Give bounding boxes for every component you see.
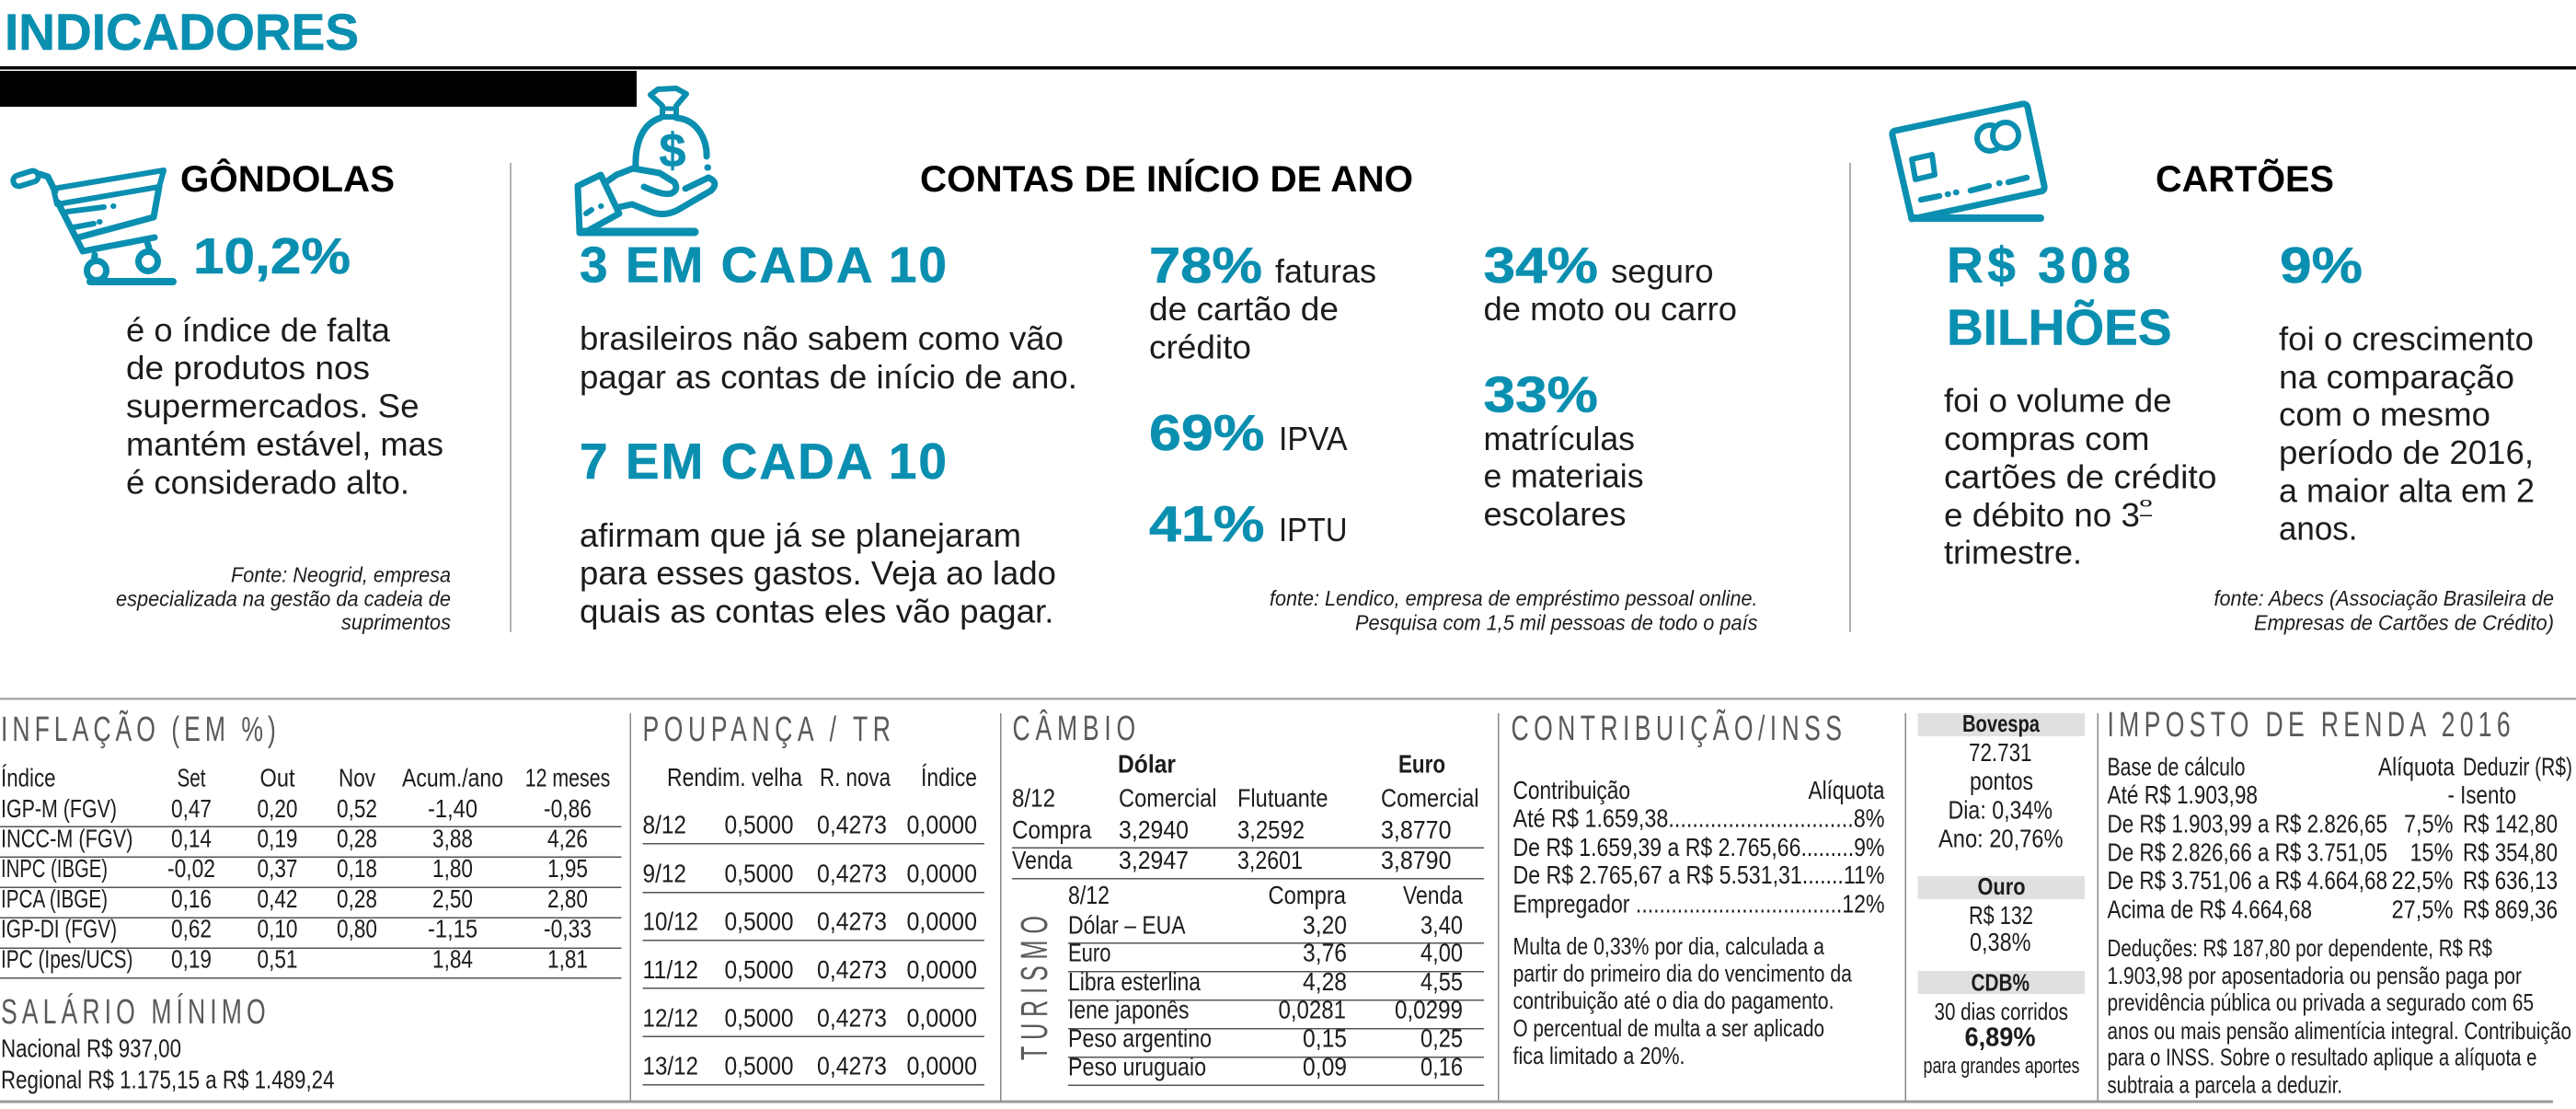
table: inflation: 3,88 xyxy=(432,825,473,852)
vertical label: turismo: TURISMO xyxy=(1015,916,1056,1060)
stat: R$ 308 bilhões: BILHÕES xyxy=(1947,298,2171,355)
table: tourism exchange: 4,55 xyxy=(1420,967,1463,996)
heading: CONTRIBUIÇÃO/INSS xyxy=(1511,708,1842,747)
table: contribution rates: De R$ 2.765,67 a R$ 5.531,31.......11% xyxy=(1512,861,1884,889)
stat: 9%: na comparação xyxy=(2279,358,2514,396)
table: exchange rates: 3,8790 xyxy=(1381,846,1452,874)
stat: R$ 308 bilhões: compras com xyxy=(1944,420,2149,457)
table: inflation: 2,80 xyxy=(547,884,588,913)
table: inflation: -0,86 xyxy=(544,794,592,823)
table: savings: 0,4273 xyxy=(817,1003,887,1033)
table: income tax: 27,5% xyxy=(2392,895,2453,924)
text block: de produtos nos xyxy=(126,349,370,387)
source note: Empresas de Cartões de Crédito) xyxy=(2254,611,2554,635)
text block: multa: contribuição até o dia do pagamento. xyxy=(1512,987,1834,1014)
source note: Pesquisa com 1,5 mil pessoas de todo o país xyxy=(1355,611,1758,635)
table: inflation: INPC (IBGE) xyxy=(1,854,108,883)
table: tourism exchange: 0,0299 xyxy=(1395,996,1463,1023)
box: CDB: 6,89% xyxy=(1965,1023,2036,1053)
stat: 33%: 33% xyxy=(1483,366,1598,423)
icon: credit card xyxy=(1892,104,2044,219)
table: savings: 0,5000 xyxy=(725,1003,793,1033)
table: inflation: 12 meses xyxy=(525,764,610,791)
table: inflation: 0,37 xyxy=(258,854,298,883)
text block: é o índice de falta xyxy=(126,311,391,349)
table: tourism exchange: Venda xyxy=(1403,881,1463,909)
box: ouro: R$ 132 xyxy=(1969,901,2033,930)
table: savings: 0,5000 xyxy=(725,955,793,984)
table: savings: 0,4273 xyxy=(817,955,887,984)
text block: multa: fica limitado a 20%. xyxy=(1512,1042,1685,1069)
table: savings: 0,0000 xyxy=(907,860,977,887)
stat: 9% xyxy=(2279,237,2535,547)
table: savings: 0,4273 xyxy=(817,1051,887,1080)
box: CDB: CDB% xyxy=(1971,968,2030,996)
table: exchange rates: Dólar xyxy=(1118,749,1176,779)
table: income tax: Alíquota xyxy=(2378,753,2455,780)
table: inflation: 1,84 xyxy=(432,944,473,974)
table: tourism exchange: Compra xyxy=(1268,881,1346,909)
table: inflation: 1,95 xyxy=(547,854,588,883)
panel: câmbio xyxy=(1012,708,1484,1086)
table: income tax: De R$ 2.826,66 a R$ 3.751,05 xyxy=(2107,838,2387,867)
stat: 7 em cada 10: afirmam que já se planejaram xyxy=(580,516,1021,554)
stat: 69%: IPVA xyxy=(1279,420,1347,457)
heading: INFLAÇÃO (EM %) xyxy=(1,709,276,748)
panel: inflação xyxy=(0,709,622,1093)
text block: é considerado alto. xyxy=(126,464,409,501)
table: savings: 0,0000 xyxy=(907,810,977,839)
table: inflation: INCC-M (FGV) xyxy=(1,825,132,852)
box: ouro: Ouro xyxy=(1978,872,2026,900)
stat: 78%: crédito xyxy=(1149,328,1251,366)
table: inflation: 0,16 xyxy=(171,884,212,913)
table: tourism exchange: Peso argentino xyxy=(1068,1023,1212,1053)
text block: deduções: subtraia a parcela a deduzir. xyxy=(2107,1071,2342,1099)
table: income tax xyxy=(2107,753,2572,924)
table: exchange rates: Comercial xyxy=(1381,784,1479,812)
source note: suprimentos xyxy=(341,610,451,634)
text: minimum wage values: Regional R$ 1.175,15 a R$ 1.489,24 xyxy=(1,1066,335,1093)
table: exchange rates: Euro xyxy=(1398,749,1445,779)
table: inflation: -1,40 xyxy=(428,794,477,823)
stat: 9%: anos. xyxy=(2279,510,2357,547)
table: exchange rates: Compra xyxy=(1012,815,1092,844)
heading: POUPANÇA / TR xyxy=(642,709,891,748)
box: bovespa: 72.731 xyxy=(1969,738,2031,767)
table: contribution rates: Alíquota xyxy=(1809,776,1885,804)
stat: 7 em cada 10: 7 EM CADA 10 xyxy=(580,433,947,490)
stat: 78%: 78% xyxy=(1149,237,1262,294)
table: savings: 0,5000 xyxy=(725,860,793,887)
table: tourism exchange xyxy=(1068,881,1484,1086)
icon: hand holding money bag xyxy=(578,88,715,233)
box: bovespa: Bovespa xyxy=(1962,710,2040,737)
table: savings: 0,4273 xyxy=(817,860,887,887)
table: inflation: 4,26 xyxy=(547,825,588,852)
panel: contribuição / INSS xyxy=(1511,708,1885,1069)
stat: 34%: 34% xyxy=(1483,237,1598,294)
table: savings: Índice xyxy=(921,763,977,791)
table: tourism exchange: 0,15 xyxy=(1303,1023,1347,1053)
source note: fonte: Lendico, empresa de empréstimo pessoal online. xyxy=(1270,586,1757,610)
table: exchange rates: 3,2940 xyxy=(1119,815,1189,844)
panel: contas de início de ano xyxy=(578,88,1758,635)
text block: multa: Multa de 0,33% por dia, calculada a xyxy=(1512,932,1824,960)
source note xyxy=(1270,586,1758,635)
text block: deduções xyxy=(2107,934,2571,1099)
table: tourism exchange: Euro xyxy=(1068,939,1111,966)
table: inflation: 0,52 xyxy=(337,794,377,823)
table: contribution rates xyxy=(1512,776,1885,918)
table: tourism exchange: 0,16 xyxy=(1420,1053,1463,1080)
panel: bovespa, ouro, CDB xyxy=(1917,710,2085,1079)
table: inflation: Set xyxy=(177,764,206,791)
stat: R$ 308 bilhões: cartões de crédito xyxy=(1944,458,2217,495)
heading: IMPOSTO DE RENDA 2016 xyxy=(2107,704,2511,744)
stat: 34%: seguro xyxy=(1611,252,1713,290)
big number: 10,2% xyxy=(193,227,351,284)
text block: mantém estável, mas xyxy=(126,425,443,463)
text block: multa: partir do primeiro dia do vencimento da xyxy=(1512,959,1852,987)
table: savings: 0,5000 xyxy=(725,810,793,839)
table: savings xyxy=(642,763,984,1086)
table: inflation: IPC (Ipes/UCS) xyxy=(1,944,132,974)
source note xyxy=(116,563,451,634)
table: tourism exchange: 3,40 xyxy=(1420,911,1463,939)
stat: 78% xyxy=(1149,237,1376,366)
text block: multa xyxy=(1512,932,1852,1069)
table: savings: 11/12 xyxy=(642,955,698,984)
table: savings: 0,5000 xyxy=(725,1051,793,1080)
table: exchange rates xyxy=(1012,749,1484,880)
icon: shopping cart xyxy=(12,169,173,282)
table: inflation: 0,80 xyxy=(337,915,377,942)
table: inflation: 0,28 xyxy=(337,884,377,913)
table: exchange rates: Comercial xyxy=(1119,784,1216,812)
table: contribution rates: Empregador ...................................12% xyxy=(1512,889,1884,918)
stat: R$ 308 bilhões: º xyxy=(2140,497,2153,517)
table: income tax: Até R$ 1.903,98 xyxy=(2107,780,2258,809)
table: inflation: 1,81 xyxy=(547,944,588,974)
table: savings: 0,5000 xyxy=(725,907,793,935)
text block xyxy=(126,311,443,501)
table: inflation: 0,18 xyxy=(337,854,377,883)
table: inflation: 0,10 xyxy=(258,915,298,942)
stat: 9%: 9% xyxy=(2280,237,2363,294)
table: savings: 9/12 xyxy=(642,860,686,887)
stat: 41% xyxy=(1149,495,1347,552)
source note: Fonte: Neogrid, empresa xyxy=(231,563,451,587)
stat: 9%: com o mesmo xyxy=(2279,396,2490,433)
title: INDICADORES xyxy=(5,3,359,61)
table: inflation: IPCA (IBGE) xyxy=(1,884,108,913)
table: inflation: Acum./ano xyxy=(402,764,503,791)
table: savings: 0,4273 xyxy=(817,907,887,935)
stat: 34%: de moto ou carro xyxy=(1483,290,1737,328)
stat: 41%: IPTU xyxy=(1279,511,1347,549)
table: income tax: 15% xyxy=(2410,838,2453,867)
stat: R$ 308 bilhões: foi o volume de xyxy=(1944,381,2171,420)
table: income tax: Acima de R$ 4.664,68 xyxy=(2107,895,2312,924)
table: income tax: Base de cálculo xyxy=(2107,753,2245,780)
box: CDB xyxy=(1917,968,2085,1079)
table: savings: 0,0000 xyxy=(907,955,977,984)
table: savings: R. nova xyxy=(820,763,891,791)
table: inflation: 2,50 xyxy=(432,884,473,913)
table: savings: 0,0000 xyxy=(907,1051,977,1080)
stat: 34% xyxy=(1483,237,1737,328)
table: inflation: IGP-M (FGV) xyxy=(1,794,117,823)
table: tourism exchange: Peso uruguaio xyxy=(1068,1053,1206,1080)
panel: cartões xyxy=(1892,104,2554,635)
box: CDB: para grandes aportes xyxy=(1923,1054,2079,1079)
table: inflation: 0,14 xyxy=(171,825,212,852)
panel: imposto de renda xyxy=(2107,704,2572,1099)
table: inflation: 0,42 xyxy=(258,884,298,913)
stat: R$ 308 bilhões: trimestre. xyxy=(1944,534,2082,571)
stat: R$ 308 bilhões: e débito no 3 xyxy=(1944,496,2140,534)
table: savings: 0,0000 xyxy=(907,907,977,935)
table: income tax: 22,5% xyxy=(2392,866,2453,895)
stat: 3 em cada 10: brasileiros não sabem como vão xyxy=(580,319,1064,357)
stat: 33%: escolares xyxy=(1483,495,1627,533)
stat: 69%: 69% xyxy=(1149,404,1264,461)
table: tourism exchange: 0,09 xyxy=(1303,1053,1347,1080)
table: tourism exchange: 4,28 xyxy=(1303,967,1347,996)
table: tourism exchange: 4,00 xyxy=(1420,939,1463,966)
box: CDB: 30 dias corridos xyxy=(1934,998,2068,1025)
table: savings: 13/12 xyxy=(642,1051,698,1080)
table: inflation: -1,15 xyxy=(428,915,477,942)
table: inflation: 0,62 xyxy=(171,915,212,942)
table: savings: 0,0000 xyxy=(907,1003,977,1033)
stat: 9%: foi o crescimento xyxy=(2279,320,2534,357)
table: exchange rates: 3,8770 xyxy=(1381,815,1452,844)
box: bovespa: pontos xyxy=(1970,767,2033,795)
heading: GÔNDOLAS xyxy=(180,157,395,200)
table: inflation: Nov xyxy=(339,764,375,791)
source note xyxy=(2214,586,2554,635)
table: savings: 12/12 xyxy=(642,1003,698,1033)
table: tourism exchange: 3,20 xyxy=(1303,911,1347,939)
text: minimum wage values: Nacional R$ 937,00 xyxy=(1,1034,181,1062)
heading: CARTÕES xyxy=(2156,157,2334,200)
table: contribution rates: De R$ 1.659,39 a R$ 2.765,66.........9% xyxy=(1512,833,1884,861)
text block: multa: O percentual de multa a ser aplicado xyxy=(1512,1014,1824,1042)
stat: 3 em cada 10: 3 EM CADA 10 xyxy=(580,236,947,293)
table: savings: 8/12 xyxy=(642,810,686,839)
table: income tax: 7,5% xyxy=(2404,810,2453,838)
table: tourism exchange: Dólar – EUA xyxy=(1068,911,1186,939)
box: ouro xyxy=(1917,872,2085,956)
table: savings: 0,4273 xyxy=(817,810,887,839)
table: inflation: 0,47 xyxy=(171,794,212,823)
table: inflation: Índice xyxy=(1,764,55,791)
black bar xyxy=(0,71,637,107)
table: exchange rates: Venda xyxy=(1012,846,1073,874)
table: tourism exchange: 0,0281 xyxy=(1279,996,1346,1023)
table: exchange rates: Flutuante xyxy=(1237,784,1328,812)
table: exchange rates: 3,2592 xyxy=(1237,815,1305,844)
stat: 7 em cada 10: quais as contas eles vão pagar. xyxy=(580,593,1054,630)
stat: 78%: faturas xyxy=(1275,252,1376,290)
stat: 3 em cada 10: pagar as contas de início de ano. xyxy=(580,358,1077,396)
stat: 3 em cada 10 xyxy=(580,236,1077,396)
table: exchange rates: 8/12 xyxy=(1012,784,1055,812)
table: inflation: Out xyxy=(259,764,295,791)
stat: 7 em cada 10: para esses gastos. Veja ao lado xyxy=(580,554,1056,592)
table: inflation xyxy=(0,764,622,979)
heading: salário mínimo: SALÁRIO MÍNIMO xyxy=(1,991,266,1031)
table: inflation: 1,80 xyxy=(432,854,473,883)
table: savings: Rendim. velha xyxy=(667,763,802,791)
box: bovespa: Dia: 0,34% xyxy=(1949,795,2053,825)
text block: supermercados. Se xyxy=(126,387,420,425)
panel: gôndolas xyxy=(12,157,451,634)
table: inflation: IGP-DI (FGV) xyxy=(1,915,117,942)
table: tourism exchange: 8/12 xyxy=(1068,881,1110,909)
panel: poupança / TR xyxy=(642,709,984,1086)
stat: 33% xyxy=(1483,366,1643,533)
box: bovespa xyxy=(1917,710,2085,852)
stat: R$ 308 bilhões: R$ 308 xyxy=(1947,237,2131,294)
table: contribution rates: Contribuição xyxy=(1512,776,1630,804)
table: exchange rates: 3,2601 xyxy=(1237,846,1303,874)
table: income tax: De R$ 3.751,06 a R$ 4.664,68 xyxy=(2107,866,2387,895)
stat: 33%: matrículas xyxy=(1483,420,1635,457)
stat: 9%: período de 2016, xyxy=(2279,433,2534,471)
table: inflation: 0,51 xyxy=(258,944,298,974)
stat: 78%: de cartão de xyxy=(1149,290,1339,328)
table: tourism exchange: 3,76 xyxy=(1303,939,1347,966)
table: inflation: 0,19 xyxy=(258,825,298,852)
heading: CÂMBIO xyxy=(1012,708,1135,747)
text: minimum wage values xyxy=(1,1034,335,1093)
table: inflation: 0,28 xyxy=(337,825,377,852)
table: savings: 10/12 xyxy=(642,907,698,935)
table: tourism exchange: Libra esterlina xyxy=(1068,967,1201,996)
stat: 9%: a maior alta em 2 xyxy=(2279,471,2535,510)
table: tourism exchange: Iene japonês xyxy=(1068,996,1189,1023)
table: inflation: -0,02 xyxy=(167,854,215,883)
source note: especializada na gestão da cadeia de xyxy=(116,587,451,611)
stat: 7 em cada 10 xyxy=(580,433,1056,630)
box: ouro: 0,38% xyxy=(1970,928,2031,956)
box: bovespa: Ano: 20,76% xyxy=(1938,825,2063,852)
table: tourism exchange: 0,25 xyxy=(1420,1023,1463,1053)
stat: 41%: 41% xyxy=(1149,495,1264,552)
stat: R$ 308 bilhões xyxy=(1944,237,2217,571)
table: inflation: -0,33 xyxy=(544,915,592,942)
table: exchange rates: 3,2947 xyxy=(1119,846,1189,874)
table: income tax: - Isento xyxy=(2447,780,2516,809)
stat: 69% xyxy=(1149,404,1347,461)
icon glyph: dollar sign: $ xyxy=(660,124,686,178)
table: income tax: De R$ 1.903,99 a R$ 2.826,65 xyxy=(2107,810,2387,838)
source note: fonte: Abecs (Associação Brasileira de xyxy=(2214,586,2554,610)
table: inflation: 0,20 xyxy=(258,794,298,823)
table: contribution rates: Até R$ 1.659,38...............................8% xyxy=(1512,804,1884,832)
heading: CONTAS DE INÍCIO DE ANO xyxy=(920,158,1413,200)
table: inflation: 0,19 xyxy=(171,944,212,974)
stat: 33%: e materiais xyxy=(1483,456,1643,495)
